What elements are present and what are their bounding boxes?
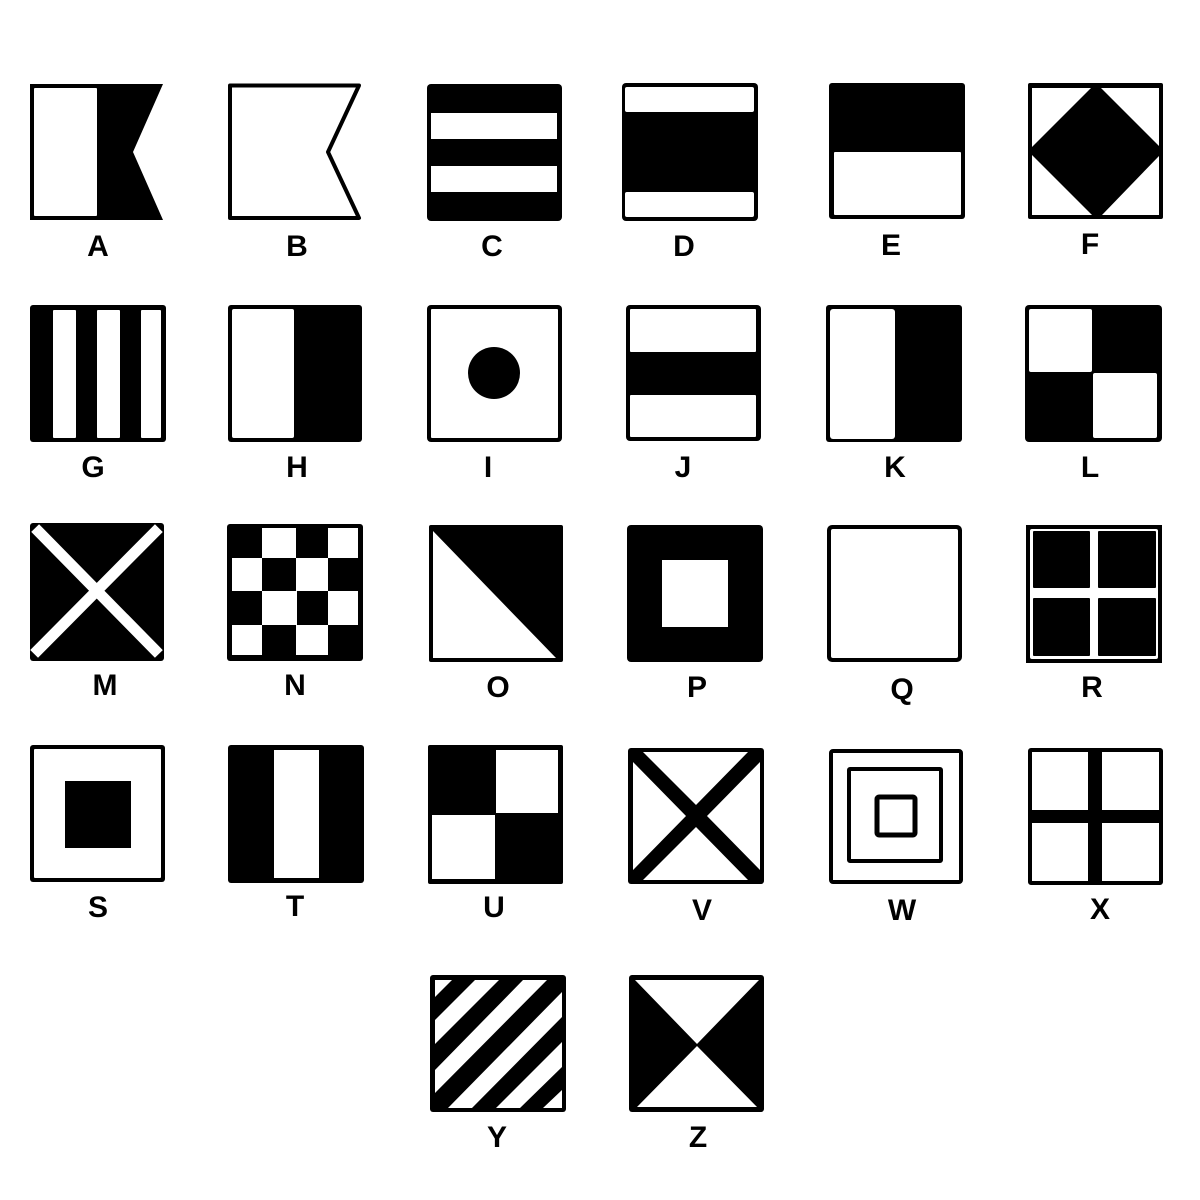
flag S: S: [88, 891, 108, 924]
flag C: [427, 84, 562, 263]
flag Q: [827, 525, 962, 706]
flag C: C: [481, 230, 503, 263]
flag X: [1030, 750, 1161, 926]
flag R: [1026, 525, 1162, 704]
flag G: [30, 305, 166, 484]
flag Z: [629, 975, 764, 1154]
flag B: B: [286, 230, 308, 263]
flag V: [628, 748, 764, 927]
flag F: F: [1081, 228, 1099, 261]
flag K: [826, 305, 962, 484]
flag J: [626, 305, 761, 484]
flag X: X: [1090, 893, 1110, 926]
flag U: U: [483, 891, 505, 924]
flag N: [227, 524, 363, 702]
flag K: K: [884, 451, 906, 484]
flag A: [30, 84, 163, 263]
flag Q: Q: [890, 673, 914, 706]
flag Z: Z: [689, 1121, 707, 1154]
flag T: T: [286, 890, 304, 923]
flag A: A: [87, 230, 109, 263]
flag E: E: [881, 229, 901, 262]
flag D: [622, 83, 758, 263]
flag J: J: [675, 451, 691, 484]
flag M: [30, 523, 164, 702]
flag P: [627, 525, 763, 704]
flag Y: [430, 975, 566, 1154]
flag S: [30, 745, 165, 924]
flag N: N: [284, 669, 306, 702]
flag M: M: [92, 669, 118, 702]
flag L: L: [1081, 451, 1099, 484]
flag W: [831, 751, 961, 927]
flag G: G: [81, 451, 105, 484]
flag T: [228, 745, 364, 923]
flag I: I: [484, 451, 492, 484]
flag V: V: [692, 894, 712, 927]
flag Y: Y: [487, 1121, 507, 1154]
flag P: P: [687, 671, 707, 704]
flag W: W: [888, 894, 917, 927]
flag B: [230, 86, 359, 263]
flag F: [1028, 83, 1163, 261]
flag L: [1025, 305, 1162, 484]
flag O: O: [486, 671, 510, 704]
flag R: R: [1081, 671, 1103, 704]
flag I: [427, 305, 562, 484]
flag U: [428, 745, 563, 924]
flag O: [429, 525, 563, 704]
flag E: [829, 83, 965, 262]
flag D: D: [673, 230, 695, 263]
flag H: H: [286, 451, 308, 484]
flag H: [228, 305, 362, 484]
